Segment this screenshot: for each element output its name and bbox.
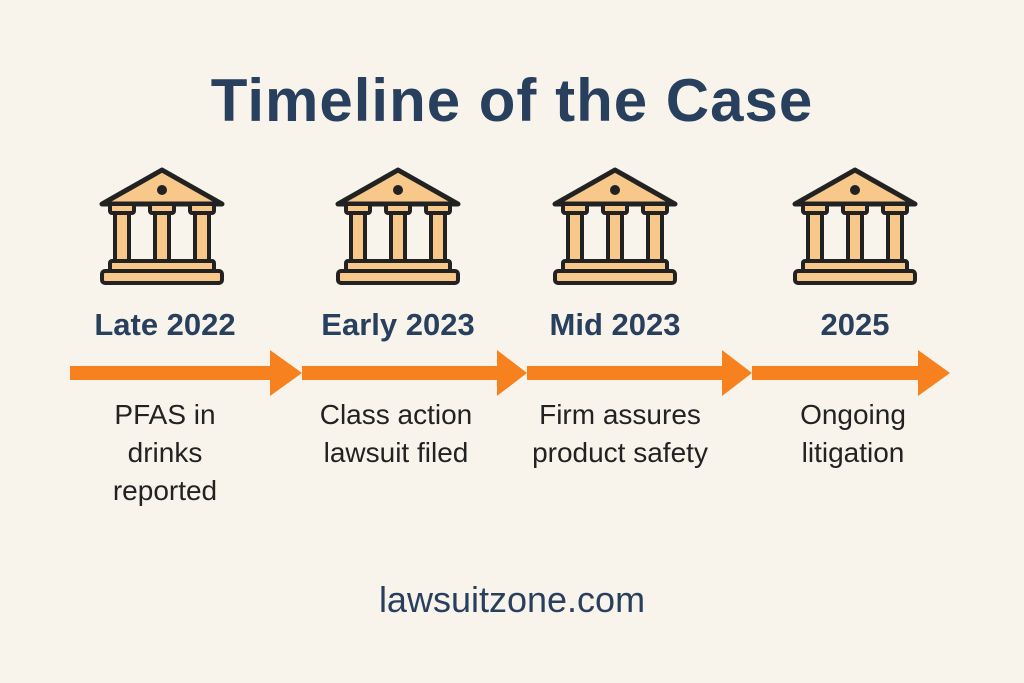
desc 2 [320, 399, 472, 468]
icon: courthouse 2 [338, 170, 458, 283]
year: 2025: 2025 [821, 307, 889, 342]
desc 1: reported [113, 475, 217, 506]
arrow 3 [527, 350, 752, 396]
arrow 1 [70, 350, 302, 396]
year: Early 2023: Early 2023 [321, 307, 475, 342]
desc 3 [532, 399, 708, 468]
desc 2: Class action [320, 399, 472, 430]
desc 1: PFAS in [114, 399, 216, 430]
desc 1 [113, 399, 217, 506]
desc 1: drinks [128, 437, 202, 468]
desc 4: Ongoing [800, 399, 906, 430]
icon: courthouse 4 [795, 170, 915, 283]
title: Timeline of the Case [211, 67, 813, 134]
year: Late 2022: Late 2022 [94, 307, 236, 342]
desc 2: lawsuit filed [324, 437, 468, 468]
icon: courthouse 3 [555, 170, 675, 283]
arrow 4 [752, 350, 950, 396]
desc 3: Firm assures [539, 399, 701, 430]
footer: lawsuitzone.com [379, 579, 645, 620]
arrow 2 [302, 350, 527, 396]
desc 4 [800, 399, 906, 468]
icon: courthouse 1 [102, 170, 222, 283]
year: Mid 2023: Mid 2023 [550, 307, 680, 342]
desc 3: product safety [532, 437, 708, 468]
desc 4: litigation [802, 437, 904, 468]
